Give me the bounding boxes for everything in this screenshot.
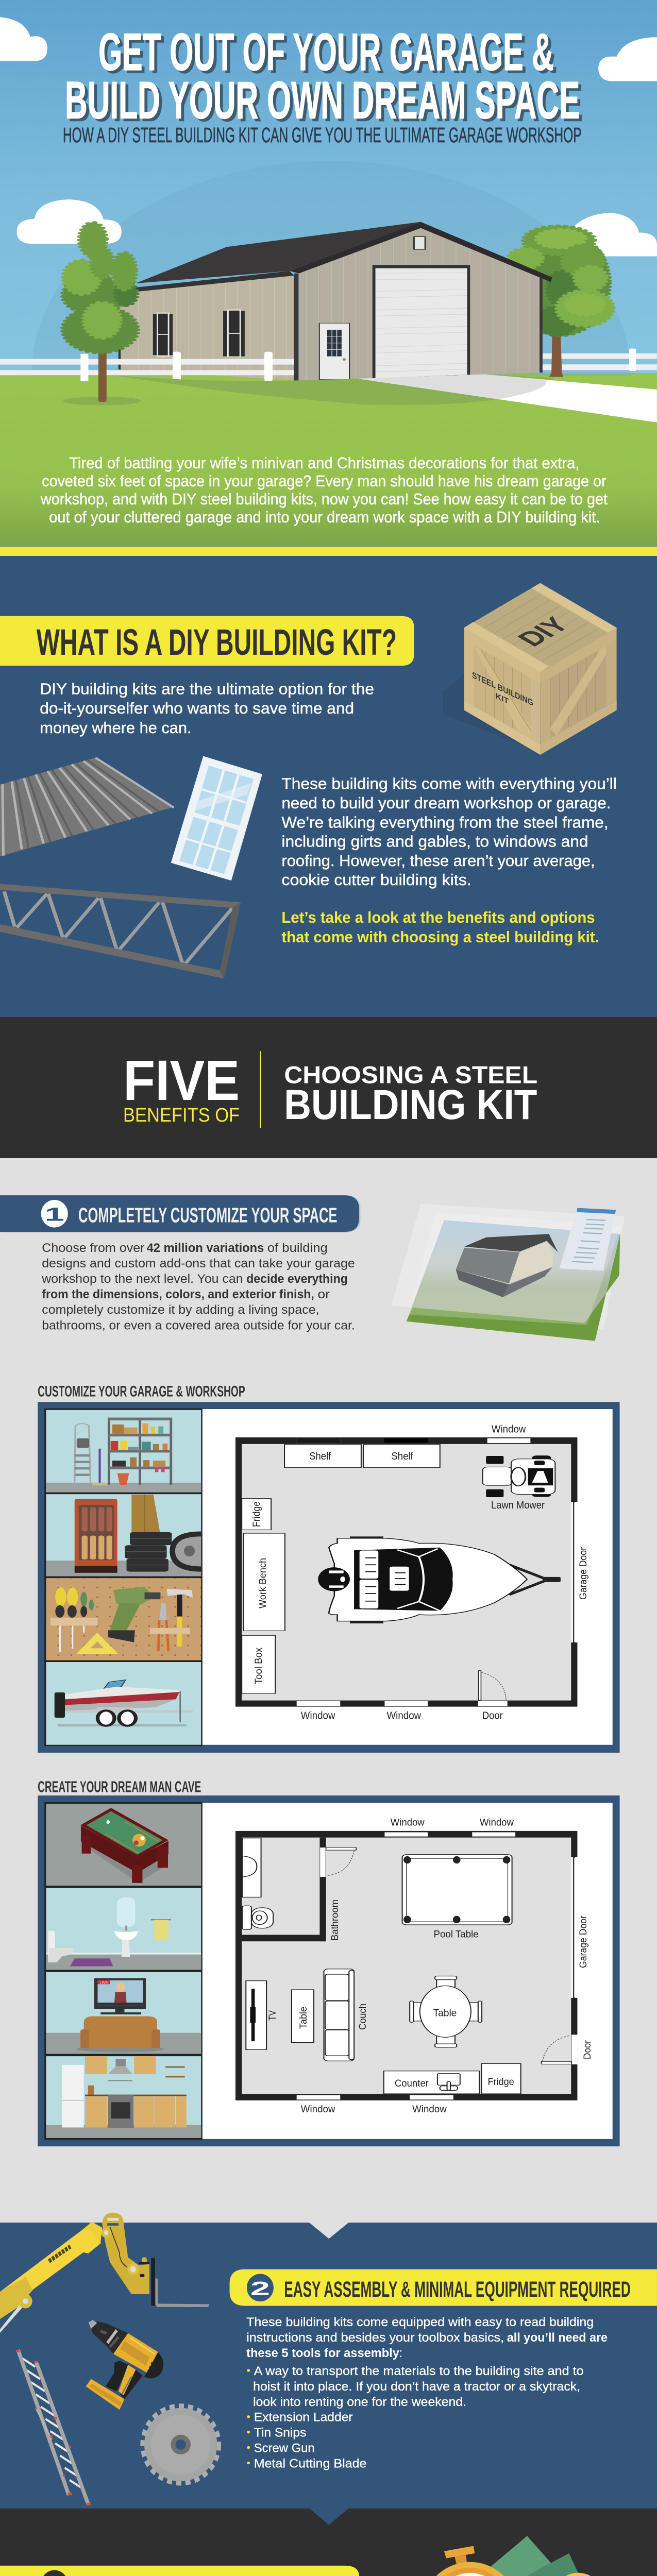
floor plan labels: Counter — [395, 2078, 429, 2089]
floor plan labels: Door — [482, 1710, 503, 1721]
floor plan labels: Pool Table — [434, 1929, 479, 1940]
floor plan labels — [301, 1423, 545, 1721]
icon: telehandler boom — [0, 2213, 210, 2333]
body text: cookie cutter building kits. — [281, 871, 471, 889]
body text: of building — [267, 1241, 328, 1255]
heading banner: 1 — [45, 1204, 64, 1225]
heading: five benefits — [123, 1048, 537, 1128]
icon: boat top view — [318, 1536, 561, 1623]
panel: create your dream man cave — [38, 1778, 620, 2146]
right tree — [509, 226, 613, 377]
tools list: Metal Cutting Blade — [254, 2457, 366, 2470]
body text: these 5 tools for assembly — [246, 2347, 399, 2360]
floor plan labels — [301, 1817, 514, 2114]
floor plan labels: Table — [433, 2008, 457, 2019]
panel: customize your garage and workshop: Fridge — [251, 1501, 262, 1527]
icon: wooden crate: DIY — [511, 613, 576, 651]
panel: customize your garage and workshop: Lawn Mower — [491, 1499, 545, 1511]
floor plan labels: Window — [492, 1423, 526, 1435]
heading banner — [0, 1195, 359, 1232]
icon: worker — [511, 2573, 613, 2576]
floor plan labels: Window — [480, 1817, 514, 1828]
icon: window — [171, 756, 262, 880]
photo: kitchen — [46, 2056, 201, 2138]
body text: including girts and gables, to windows and — [281, 833, 588, 851]
body text — [246, 2315, 608, 2360]
panel: create your dream man cave: Table — [298, 2007, 309, 2029]
body text — [42, 1241, 355, 1332]
building — [119, 222, 552, 381]
dome behind building — [31, 161, 631, 376]
icon: wooden crate — [443, 583, 617, 755]
intro text: do-it-yourselfer who wants to save time and — [40, 700, 354, 717]
floor plan: furniture — [242, 1445, 440, 1693]
body text: 42 million variations — [147, 1241, 264, 1255]
floor plan: garage shell — [235, 1437, 578, 1707]
panel: customize your garage and workshop: Tool Box — [254, 1648, 264, 1684]
front fence — [0, 352, 294, 381]
photo: pool table — [46, 1804, 201, 1886]
body text: bathrooms, or even a covered area outside for your car. — [42, 1319, 355, 1332]
icon: saw blade — [143, 2406, 219, 2483]
panel: customize your garage and workshop: Garage Door — [578, 1547, 589, 1600]
garage door — [373, 265, 470, 378]
far right fence post — [629, 349, 636, 371]
tools list: look into renting one for the weekend. — [253, 2395, 466, 2409]
photo: boat on trailer — [46, 1662, 201, 1745]
ground shadow and driveway — [111, 375, 657, 422]
panel: create your dream man cave: Couch — [358, 2004, 368, 2030]
floor plan: furniture: Shelf — [391, 1450, 413, 1462]
panel: benefit 3 do it yourself — [0, 2509, 613, 2576]
intro paragraph — [40, 454, 608, 526]
photo: bathroom — [46, 1888, 201, 1970]
panel: create your dream man cave: CREATE YOUR DREAM MAN CAVE — [38, 1778, 201, 1795]
body text: or — [317, 1288, 330, 1301]
panel: create your dream man cave: Garage Door — [578, 1915, 589, 1968]
body text: from the dimensions, colors, and exterior finish, — [42, 1288, 314, 1301]
man door — [319, 323, 349, 380]
windows — [153, 314, 173, 355]
photo: living room tv: LIVE — [100, 1980, 108, 1985]
left tree — [63, 223, 141, 405]
icon: stopwatch — [423, 2546, 518, 2576]
body text: : — [399, 2347, 402, 2360]
heading banner: 2 — [250, 2278, 270, 2299]
panel: customize your garage and workshop: CUSTOMIZE YOUR GARAGE & WORKSHOP — [38, 1383, 245, 1400]
icon: counter and fridge — [384, 2063, 521, 2094]
icon: bathroom fixtures — [242, 1838, 273, 1929]
floor plan labels: Fridge — [487, 2077, 514, 2088]
icon: steel truss — [0, 884, 241, 978]
panel: benefit 1 customize — [0, 1195, 625, 1341]
heading banner — [0, 616, 414, 666]
hero sky: dome and clouds — [0, 17, 657, 376]
icon: 3D building designer screenshot — [392, 1204, 625, 1341]
panel: create your dream man cave: TV — [267, 2010, 278, 2021]
body text: Choose from over — [42, 1241, 145, 1255]
icon: lawn mower — [483, 1455, 555, 1497]
icon: wooden crate: KIT — [496, 691, 509, 706]
intro text — [40, 681, 374, 737]
floor plan labels: Window — [391, 1817, 425, 1828]
icon: extension ladder — [16, 2350, 91, 2505]
icon: tv, table and couch — [246, 1969, 354, 2061]
callout text — [281, 909, 599, 946]
photo: pegboard tools — [46, 1578, 201, 1660]
tools list: Tin Snips — [254, 2426, 306, 2439]
panel: customize your garage and workshop: Work Bench — [258, 1558, 268, 1608]
panel: create your dream man cave: Bathroom — [330, 1900, 341, 1941]
intro text: money where he can. — [40, 719, 192, 737]
heading: five benefits: BENEFITS OF — [123, 1104, 240, 1126]
body text: workshop to the next level. You can — [42, 1273, 243, 1286]
icon: wooden crate: STEEL BUILDING — [472, 670, 533, 708]
panel: create your dream man cave: Door — [582, 2040, 593, 2059]
body text: decide everything — [246, 1273, 348, 1286]
hero illustration: steel building, trees, fence — [0, 222, 657, 422]
icon: metal roof panel — [0, 758, 174, 856]
floor plan labels: Window — [301, 2104, 335, 2114]
intro text: DIY building kits are the ultimate option for the — [40, 681, 374, 698]
tools list: Screw Gun — [254, 2442, 315, 2455]
tools list — [247, 2365, 584, 2470]
heading: five benefits: FIVE — [123, 1048, 240, 1112]
icon: round dining table — [410, 1976, 482, 2047]
panel: benefit 2 easy assembly — [230, 2223, 657, 2470]
icon: cordless drill — [86, 2320, 163, 2410]
back fence right — [542, 353, 657, 370]
title — [65, 22, 580, 129]
icon: pool table top view — [402, 1855, 512, 1925]
photo: shelves and ladder — [46, 1410, 201, 1493]
body text: completely customize it by adding a living space, — [42, 1303, 319, 1316]
floor plan labels: Window — [412, 2104, 447, 2114]
heading banner — [230, 2269, 657, 2306]
tools illustration: boom, drill, saw blade, ladder — [0, 2213, 219, 2505]
floor plan: furniture: Shelf — [309, 1450, 331, 1462]
floor plan: man cave shell — [235, 1831, 578, 2100]
floor plan labels: Window — [301, 1710, 335, 1721]
heading banner — [0, 2566, 359, 2576]
icon: money — [490, 2536, 595, 2576]
tools list: Extension Ladder — [254, 2411, 353, 2424]
floor plan labels: Window — [386, 1710, 421, 1721]
photo: fridge and tires — [46, 1494, 201, 1577]
panel: customize your garage and workshop — [38, 1383, 620, 1753]
body text — [281, 775, 617, 889]
body text: designs and custom add-ons that can take your garage — [42, 1257, 355, 1270]
photo: living room tv — [46, 1972, 201, 2054]
panel: what is a DIY building kit — [0, 616, 617, 978]
clouds — [0, 17, 657, 256]
